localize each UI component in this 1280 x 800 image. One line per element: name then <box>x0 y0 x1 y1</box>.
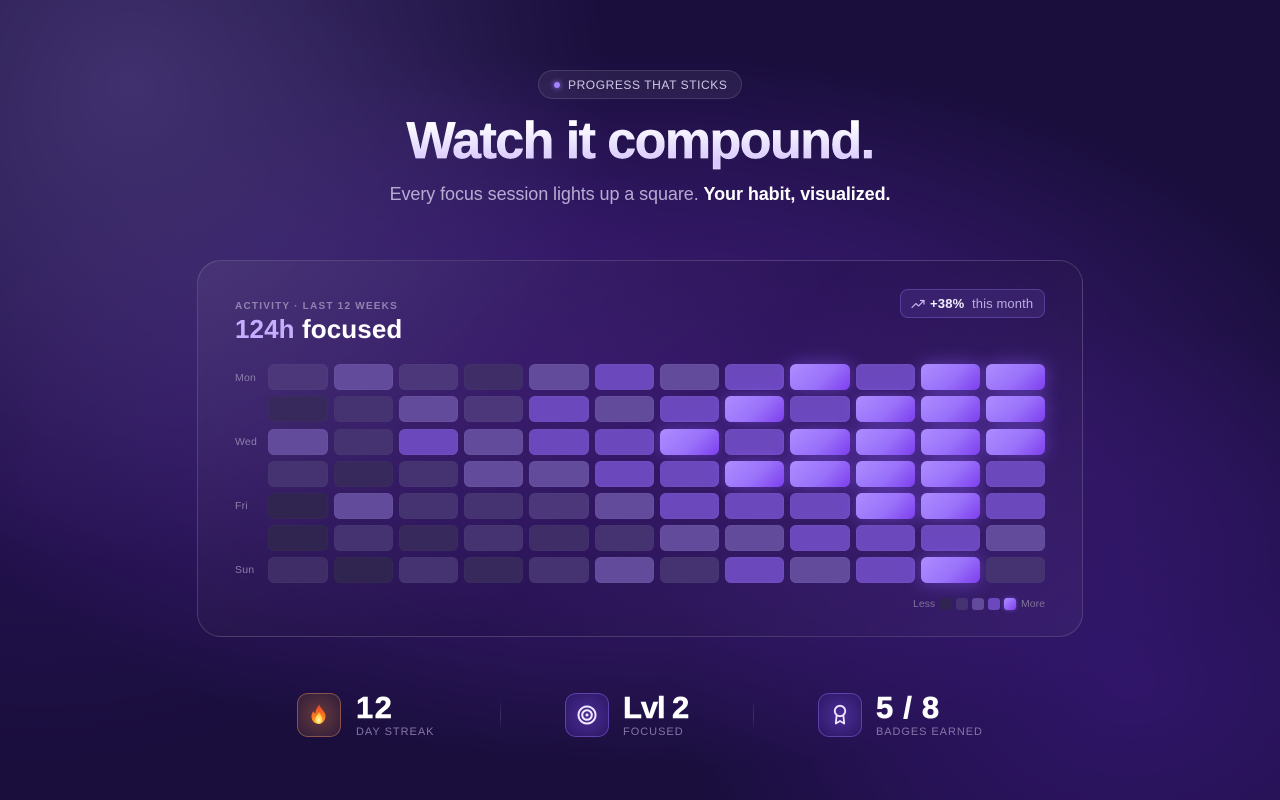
label: focused: FOCUSED <box>623 726 684 738</box>
card eyebrow: ACTIVITY · LAST 12 WEEKS <box>235 301 398 312</box>
divider <box>753 700 754 730</box>
value: 5 / 8: 5 / 8 <box>876 690 940 725</box>
label: badges earned: BADGES EARNED <box>876 726 983 738</box>
day label: Wed: Wed <box>235 436 257 448</box>
legend: less to more: Less <box>913 598 935 610</box>
panel: activity card <box>197 260 1083 637</box>
icon: target <box>565 693 609 737</box>
badge: progress that sticks: PROGRESS THAT STICKS <box>568 78 727 92</box>
title <box>0 111 1280 171</box>
icon: ribbon badge <box>818 693 862 737</box>
card heading: 124h focused: 124h focused <box>235 314 402 344</box>
stat: badges earned <box>818 690 983 738</box>
icon: flame <box>297 693 341 737</box>
label: day streak: DAY STREAK <box>356 726 434 738</box>
stat: day streak <box>297 690 434 738</box>
legend: less to more <box>913 596 1045 612</box>
trend chip: +38% this month <box>900 289 1045 318</box>
heatmap grid: 12 weeks by 7 days <box>268 354 1054 593</box>
title: Watch it compound. <box>406 112 874 170</box>
day label: Mon: Mon <box>235 372 256 384</box>
legend: less to more: More <box>1021 598 1045 610</box>
divider <box>500 700 501 730</box>
day label: Fri: Fri <box>235 500 248 512</box>
day label: Sun: Sun <box>235 564 254 576</box>
stat: focused level <box>565 690 688 738</box>
trend chip: +38% this month: this month <box>972 296 1033 311</box>
value: Lvl 2: Lvl 2 <box>623 690 688 725</box>
value: 12: 12 <box>356 690 393 725</box>
subtitle: Every focus session lights up a square. Your habit, visualized. <box>390 184 890 204</box>
trend chip: +38% this month: +38% <box>930 296 964 311</box>
badge: progress that sticks <box>538 70 742 99</box>
